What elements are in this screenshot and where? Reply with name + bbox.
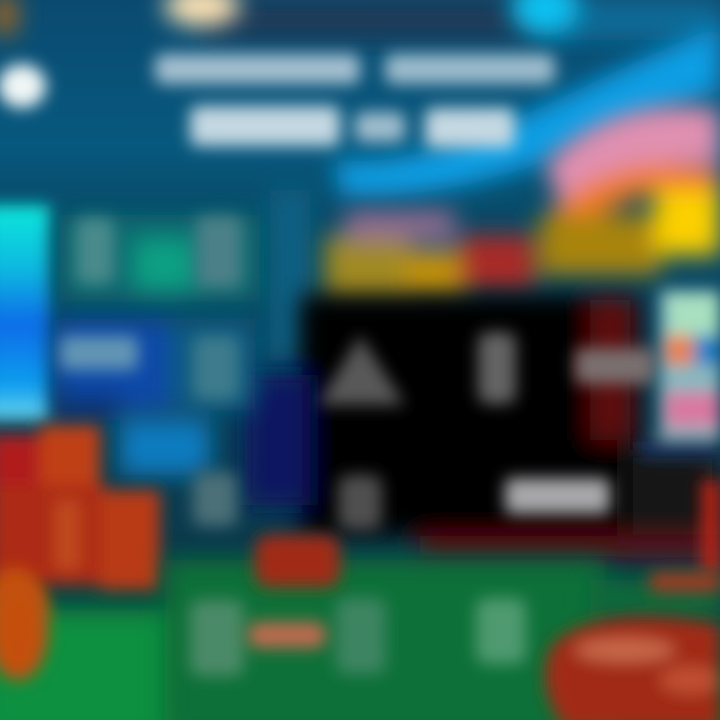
panel: teal grid <box>55 215 260 475</box>
panel: rainbow arch <box>325 106 720 305</box>
label: dark board lower <box>505 478 610 514</box>
panel: red blocks left <box>0 425 160 590</box>
icon: dark board top left <box>318 335 405 405</box>
orange shape over floor <box>0 580 48 680</box>
panel: green floor <box>0 560 720 720</box>
top glow light <box>0 0 579 37</box>
red shapes on floor <box>248 535 340 648</box>
teal grid labels <box>60 216 242 526</box>
orange shape lower left <box>0 567 54 683</box>
icon: white blob top left <box>0 64 46 108</box>
title line 2 <box>190 106 340 146</box>
label: teal middle left <box>60 336 138 370</box>
green floor icons <box>190 598 526 676</box>
icon: dark board top middle <box>478 332 516 404</box>
label: dark board right <box>575 348 655 384</box>
icon: dark board lower left <box>338 475 382 530</box>
title <box>155 54 555 148</box>
icon: teal lower <box>193 472 237 526</box>
panel: dark central board <box>245 295 720 557</box>
icon: floor middle <box>336 598 386 674</box>
icon: floor right <box>476 598 526 664</box>
panel: red shape bottom right <box>545 572 720 720</box>
icon: teal top left <box>76 218 114 284</box>
title line 1 <box>155 54 360 84</box>
dark board icons and labels <box>318 332 655 530</box>
panel: colourful right column <box>640 290 720 575</box>
icon: floor left <box>190 600 244 676</box>
blue diagonal streak <box>335 25 720 196</box>
icon: teal top right <box>196 216 242 288</box>
icon: teal middle right <box>193 336 239 400</box>
panel: cyan left column <box>0 205 50 420</box>
